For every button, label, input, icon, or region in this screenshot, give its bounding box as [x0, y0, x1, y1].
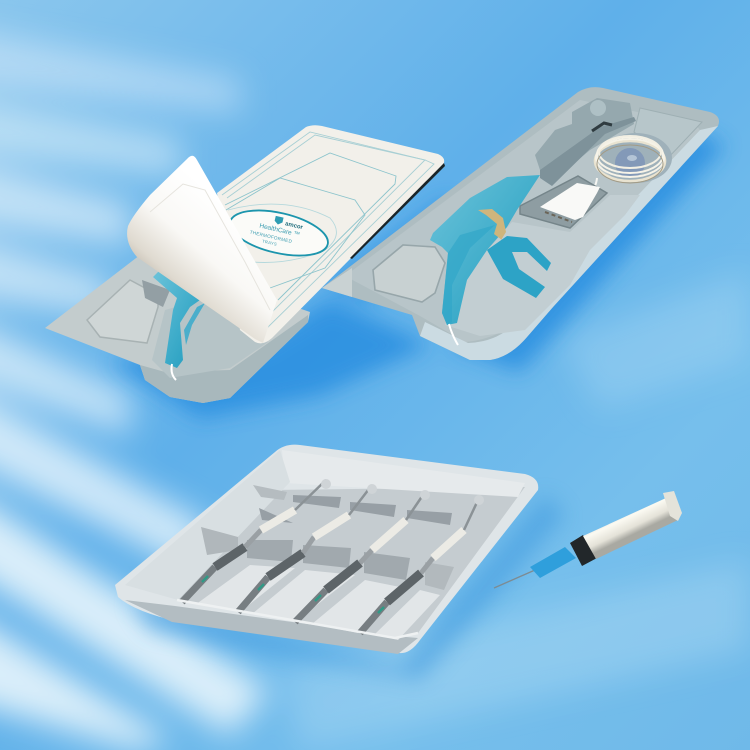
circular dome well — [600, 133, 672, 183]
front rim — [177, 600, 418, 638]
lidding sheet — [127, 125, 445, 343]
teal handle — [153, 270, 200, 368]
floor — [152, 300, 268, 378]
handle sliver — [184, 303, 205, 345]
syringe 3 — [295, 490, 430, 622]
white connector — [540, 183, 600, 220]
syringe 4 — [360, 495, 484, 633]
lid shadow edge — [350, 163, 445, 259]
lid label — [226, 202, 332, 264]
connector tray — [520, 176, 607, 228]
lid label: THERMOFORMED — [249, 229, 293, 244]
upper cavity — [535, 98, 634, 175]
handle highlight — [442, 225, 495, 325]
syringes — [182, 479, 484, 633]
inner recess left — [373, 245, 445, 302]
loose syringe — [494, 491, 682, 588]
coiled cable — [590, 136, 665, 190]
inner recess — [87, 280, 158, 343]
gold clip — [478, 209, 506, 243]
tray floor — [345, 100, 700, 342]
syringe 2 — [238, 484, 377, 612]
lid border lines — [222, 132, 434, 330]
right tray — [322, 87, 719, 360]
bottom tray — [115, 445, 538, 654]
brand logo — [274, 216, 284, 225]
teal stapler handle — [430, 175, 540, 325]
peeled corner — [127, 156, 277, 343]
peel inner lines — [150, 184, 270, 310]
tab — [142, 280, 170, 307]
tray under edge — [125, 600, 418, 654]
left tray — [45, 255, 310, 403]
lid label: TRAYS — [262, 238, 278, 247]
collar — [570, 535, 597, 566]
lid shape — [217, 125, 444, 343]
blue dome — [615, 148, 645, 178]
clear lower cavity — [445, 195, 640, 336]
trigger — [487, 236, 551, 298]
rear wall — [282, 450, 525, 497]
lid label: HealthCare ™ — [259, 223, 300, 239]
barrel — [583, 498, 678, 559]
tray floor — [178, 487, 525, 638]
tray shadows — [110, 130, 725, 418]
right upper panel — [634, 108, 702, 158]
flange — [663, 491, 682, 521]
left wall — [125, 450, 290, 600]
dome — [590, 100, 606, 116]
tray body — [45, 255, 310, 403]
hub — [530, 547, 576, 578]
needle — [494, 570, 535, 588]
tray flange — [115, 445, 538, 653]
side wall highlight — [420, 126, 718, 360]
syringe 1 — [182, 479, 331, 602]
white lead wire — [449, 324, 458, 345]
bottom tray shadow — [130, 495, 565, 680]
light lanes — [195, 565, 440, 640]
connector pins — [545, 212, 572, 222]
tray body — [322, 87, 719, 360]
white wire — [172, 364, 176, 380]
upper dividers — [253, 485, 452, 525]
device shaft — [540, 117, 636, 186]
tray lower wall — [140, 315, 308, 403]
label ellipse — [226, 202, 332, 264]
strip flange — [322, 268, 352, 297]
lower dividers — [201, 527, 454, 590]
label text: amcor — [284, 221, 304, 231]
